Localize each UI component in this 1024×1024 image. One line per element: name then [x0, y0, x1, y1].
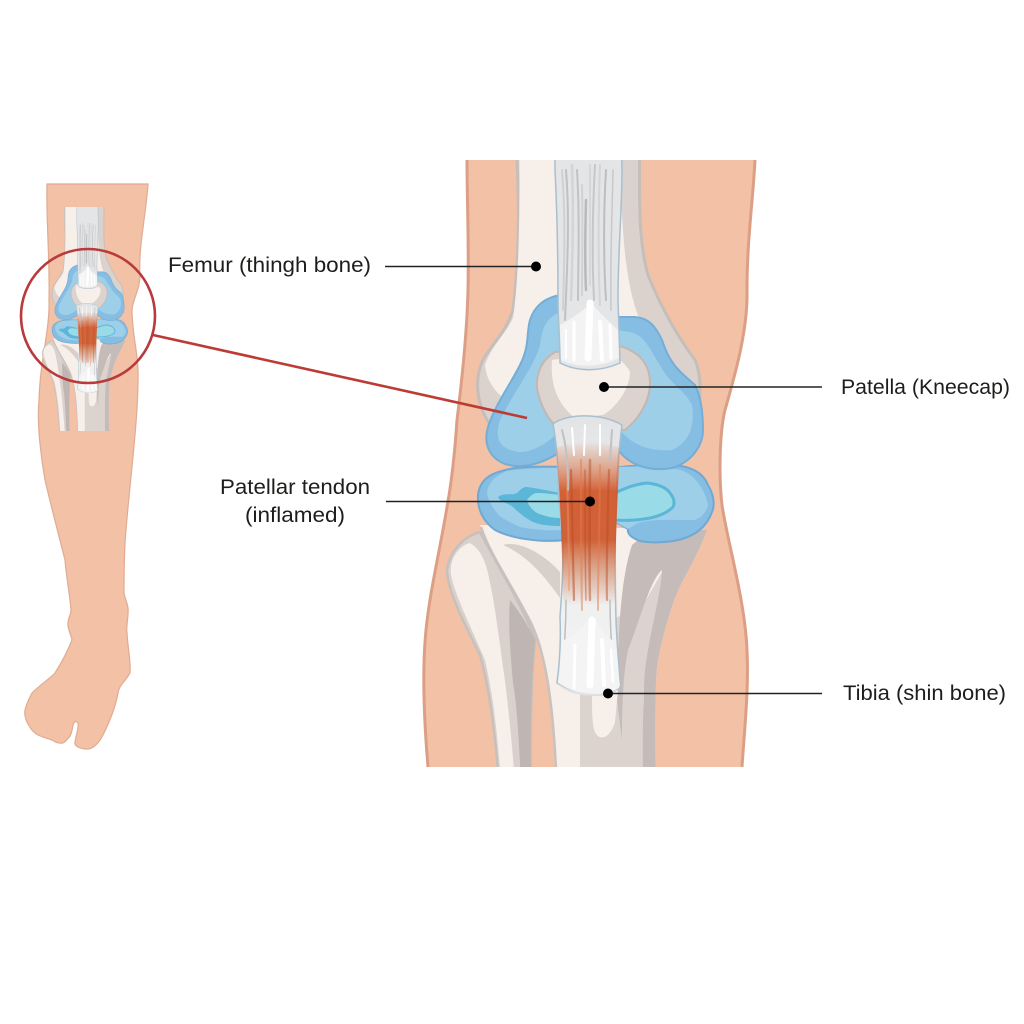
- label: tibia: [603, 681, 1006, 705]
- label: patellar tendon: [220, 475, 595, 527]
- small leg outline: [25, 184, 148, 749]
- small leg illustration: [21, 184, 155, 749]
- upper quadriceps tendon: [555, 110, 622, 370]
- femur bone: [478, 110, 700, 432]
- small knee anatomy: [42, 206, 128, 436]
- fibula bone: [447, 532, 535, 830]
- large knee illustration: [422, 160, 756, 768]
- label: patellar tendon: (inflamed): [245, 503, 345, 527]
- right leg contour: [720, 160, 755, 767]
- label: patella: [599, 375, 1010, 399]
- magnifier circle: [21, 249, 155, 383]
- tibia bone: [480, 525, 707, 830]
- meniscus cartilage: [478, 465, 714, 542]
- label: patellar tendon: Patellar tendon: [220, 475, 370, 499]
- zoom connector line: [153, 335, 527, 418]
- label: patella: Patella (Kneecap): [841, 375, 1010, 399]
- label: femur: [168, 253, 541, 277]
- left leg contour: [424, 160, 468, 767]
- lower patellar tendon inflamed: [553, 416, 622, 696]
- label: tibia: Tibia (shin bone): [843, 681, 1006, 705]
- label: femur: Femur (thingh bone): [168, 253, 371, 277]
- upper blue bursa: [486, 295, 703, 469]
- patella: [537, 346, 650, 430]
- large leg skin: [424, 160, 755, 767]
